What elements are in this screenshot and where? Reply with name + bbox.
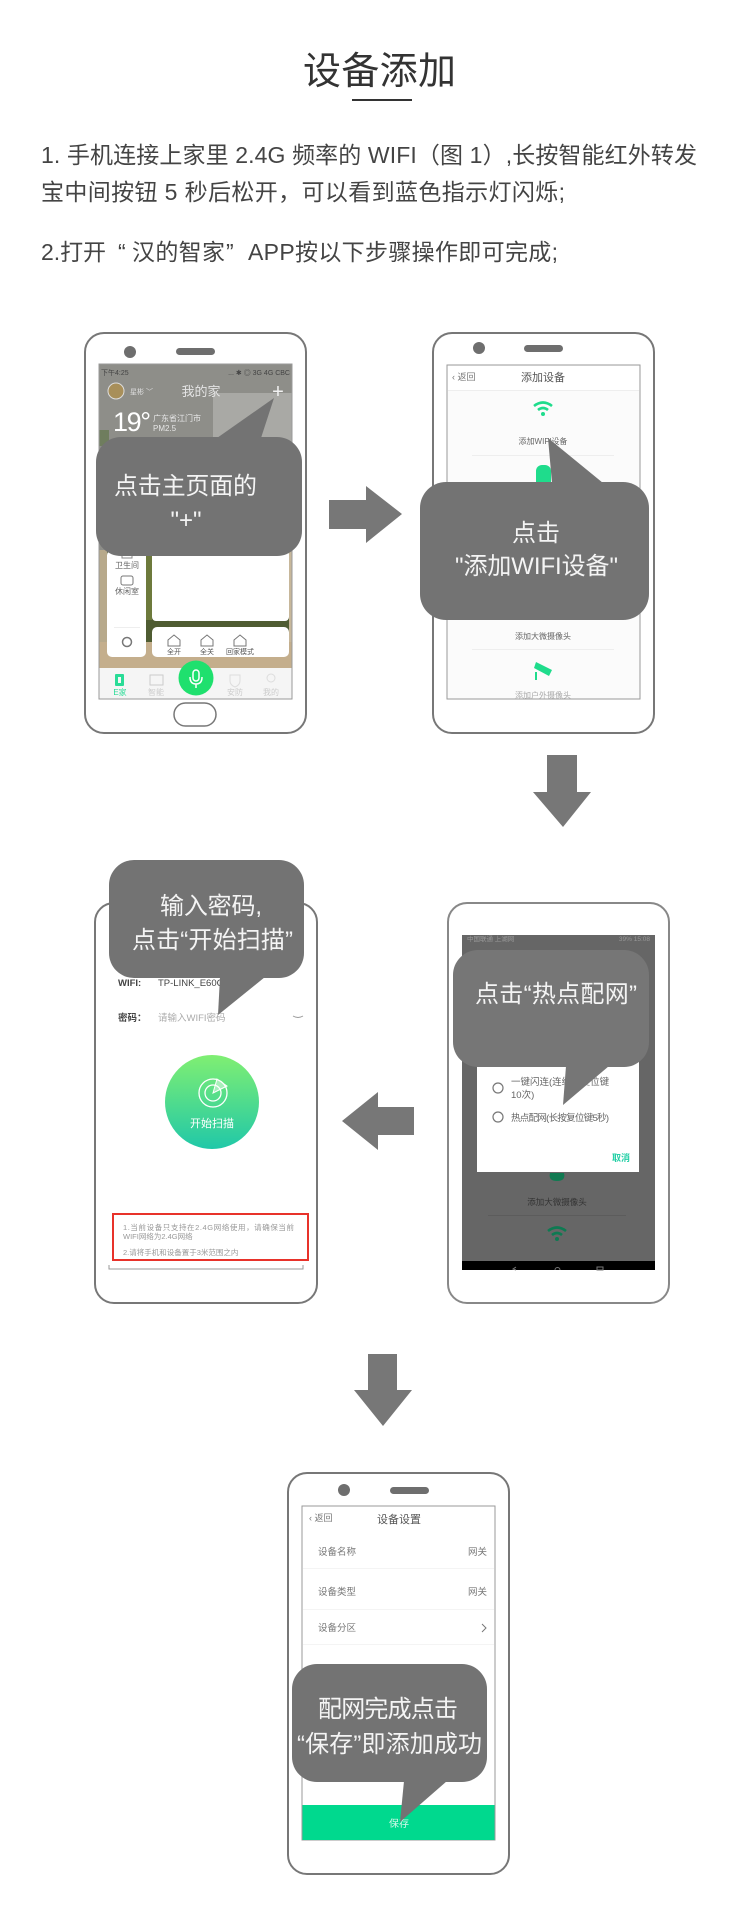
app screen: add device: ‹ 返回 (452, 371, 476, 382)
arrow: down 1 (533, 755, 591, 827)
dialog: 热点配网(长按复位键5秒) (511, 1112, 609, 1124)
wifi form: WIFI: (118, 978, 141, 989)
dialog: 取消 (612, 1152, 630, 1163)
callout: step 5: 配网完成点击 (318, 1696, 458, 1723)
app header: ... ✱ ◎ 3G 4G CBC (228, 369, 290, 377)
dimmed list: 添加大微摄像头 (527, 1197, 587, 1207)
tab bar: 安防 (227, 687, 243, 697)
text block: instructions: 2.打开 (41, 239, 106, 265)
callout: step 2: "添加WIFI设备" (455, 553, 618, 580)
wifi form: 请输入WIFI密码 (158, 1012, 226, 1024)
callout: step 1: "+" (170, 507, 202, 534)
callout: step 5 (292, 1664, 487, 1822)
app screen: device settings: 设备分区 (318, 1622, 357, 1634)
callout: step 1 (96, 398, 302, 556)
app header: 广东省江门市 (153, 413, 201, 423)
button: start scan (165, 1055, 259, 1149)
app header: + (272, 381, 284, 403)
scene buttons: 回家模式 (226, 647, 254, 656)
note box: WIFI网络为2.4G网络 (123, 1231, 193, 1241)
scene buttons (167, 635, 254, 656)
text block: instructions: 1. 手机连接上家里 2.4G 频率的 WIFI（图 1）,长按智能红外转发 (41, 142, 697, 168)
tab bar: E家 (113, 687, 127, 697)
dimmed list (462, 1173, 655, 1270)
tab bar: 我的 (263, 687, 279, 697)
button: start scan: 开始扫描 (190, 1116, 234, 1130)
app header: 我的家 (181, 384, 221, 399)
app screen: add device: 添加WIFI设备 (519, 436, 567, 446)
arrow: left (342, 1092, 414, 1150)
app header: 下午4:25 (101, 368, 129, 377)
panel: step 4 phone: 中国联通 上湖网 (467, 934, 514, 943)
callout: step 4: 点击“热点配网” (475, 981, 637, 1008)
panel: step 1 phone (85, 333, 306, 733)
wifi form (118, 978, 303, 1024)
room list (114, 552, 140, 646)
callout: step 3: 点击“开始扫描” (132, 927, 293, 954)
callout: step 4 (453, 950, 649, 1105)
text block: instructions (41, 142, 697, 265)
app screen: device settings: 网关 (468, 1546, 487, 1558)
text block: instructions: APP按以下步骤操作即可完成; (248, 239, 558, 265)
app header: PM2.5 (153, 424, 177, 433)
app screen: device settings: 设备类型 (318, 1586, 357, 1598)
callout: step 1: 点击主页面的 (114, 473, 257, 500)
dialog: 10次) (511, 1089, 534, 1101)
panel: step 4 phone: 39% 15:08 (619, 936, 650, 943)
tab bar: 智能 (148, 687, 164, 697)
callout: step 2: 点击 (512, 520, 560, 547)
save button (302, 1805, 494, 1840)
app screen: add device (448, 366, 639, 700)
text block: instructions: ” (226, 239, 234, 265)
callout: step 2 (420, 438, 649, 620)
dialog: 一键闪连(连续按复位键 (511, 1076, 610, 1088)
text block: instructions: 汉的智家 (132, 239, 225, 265)
text block: instructions: “ (118, 239, 126, 265)
panel: step 5 phone (288, 1473, 509, 1874)
app screen: device settings: 设备设置 (377, 1512, 421, 1526)
app header: 19° (113, 407, 151, 437)
callout: step 5: “保存”即添加成功 (297, 1731, 482, 1758)
app screen: add device: 添加户外摄像头 (515, 690, 571, 700)
wifi form: TP-LINK_E60C (158, 978, 224, 989)
note box: 2.请将手机和设备置于3米范围之内 (123, 1247, 238, 1257)
callout: step 3: 输入密码, (160, 893, 262, 920)
app screen: add device: 添加大微摄像头 (515, 631, 571, 641)
text block: instructions: 宝中间按钮 5 秒后松开，可以看到蓝色指示灯闪烁; (41, 179, 565, 205)
note box: 1.当前设备只支持在2.4G网络使用，请确保当前 (123, 1222, 294, 1232)
wifi form: 密码： (118, 1012, 147, 1024)
arrow: right (329, 486, 402, 543)
scene buttons: 全开 (167, 647, 181, 656)
note box (113, 1214, 308, 1260)
room list: 卫生间 (115, 560, 139, 570)
app header: 星彬 ﹀ (130, 387, 153, 396)
panel: step 4 phone (448, 903, 669, 1303)
panel: step 2 phone (420, 333, 654, 733)
callout: step 3 (109, 860, 304, 1015)
tab bar (113, 674, 279, 697)
app screen: device settings: 网关 (468, 1586, 487, 1598)
app screen: device settings: ‹ 返回 (309, 1512, 332, 1523)
app screen: device settings: 设备名称 (318, 1546, 357, 1558)
room list: 休闲室 (115, 586, 139, 596)
scene buttons: 全关 (200, 647, 214, 656)
arrow: down 2 (354, 1354, 412, 1426)
app header (101, 368, 290, 437)
save button: 保存 (389, 1817, 409, 1830)
app screen: device settings (303, 1512, 494, 1645)
title: 设备添加 (303, 51, 456, 93)
app screen: add device: 添加设备 (521, 370, 565, 384)
dialog (477, 1060, 639, 1172)
panel: step 3 phone (95, 860, 317, 1303)
icon: microphone button (178, 660, 214, 696)
